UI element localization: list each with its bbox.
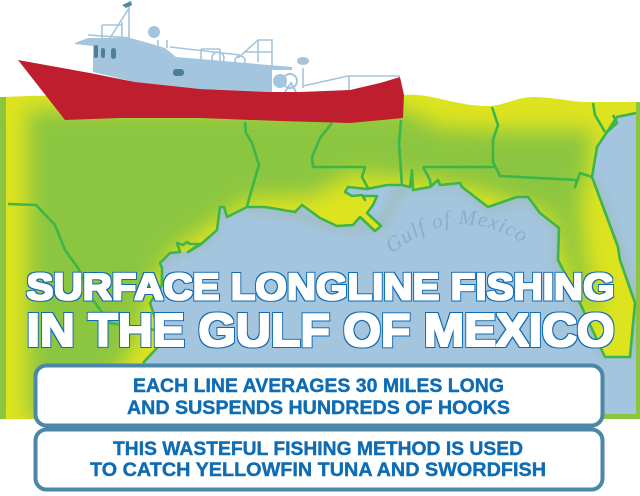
callout 2 text <box>90 438 546 481</box>
label: Gulf of Mexico: Gulf of Mexico <box>388 210 526 251</box>
white sky above the wave <box>0 90 640 106</box>
callout box 2 <box>36 430 602 490</box>
map of the Gulf coast <box>0 90 640 420</box>
gulf water <box>6 102 636 414</box>
map border <box>0 97 640 419</box>
fishing boat <box>18 1 404 123</box>
boat hull <box>18 60 404 123</box>
state borders <box>8 103 617 330</box>
label: Gulf of Mexico <box>388 210 526 251</box>
callout 1 text <box>127 375 510 419</box>
callout box 1 <box>36 366 602 426</box>
boat rigging and masts <box>88 6 400 90</box>
title <box>26 266 614 356</box>
callout 2 text: THIS WASTEFUL FISHING METHOD IS USED <box>113 438 523 460</box>
title line 2: IN THE GULF OF MEXICO <box>26 304 614 356</box>
callout 1 text: AND SUSPENDS HUNDREDS OF HOOKS <box>127 397 510 419</box>
coastline <box>143 113 636 363</box>
title line 1: SURFACE LONGLINE FISHING <box>26 266 614 308</box>
boat winch <box>283 74 297 92</box>
boat radar <box>122 1 132 8</box>
land mass <box>0 90 640 420</box>
boat cabin <box>75 38 292 92</box>
coastal shading <box>160 177 635 357</box>
callout 2 text: TO CATCH YELLOWFIN TUNA AND SWORDFISH <box>90 459 546 481</box>
boat windows <box>94 45 184 76</box>
callout 1 text: EACH LINE AVERAGES 30 MILES LONG <box>133 375 504 397</box>
